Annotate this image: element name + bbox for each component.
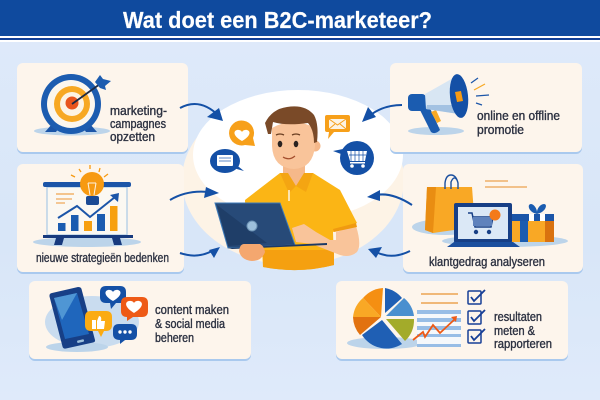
icon: target with arrow bbox=[34, 74, 111, 136]
icon: shopping bag, laptop and gift bbox=[412, 175, 568, 247]
icon: presentation board with bulb and chart bbox=[33, 165, 141, 247]
left hand bbox=[239, 244, 265, 261]
icon: heart bubble bbox=[229, 120, 255, 146]
laptop bbox=[215, 203, 295, 248]
arm and hand bbox=[292, 224, 359, 256]
text: content maken en social media beheren: & social media bbox=[155, 317, 225, 331]
icon: shopping cart bubble bbox=[333, 141, 374, 175]
arrow: promotion to marketer bbox=[362, 105, 402, 122]
icon: chat bubble bbox=[210, 149, 244, 173]
neck bbox=[283, 160, 305, 186]
hair bbox=[265, 106, 318, 143]
text: marketingcampagnes opzetten bbox=[110, 104, 167, 144]
text: resultaten meten en rapporteren: meten & bbox=[494, 324, 536, 338]
icon: mail bubble bbox=[325, 115, 350, 139]
panel: resultaten meten en rapporteren bbox=[336, 281, 568, 361]
text: online en offline promotie bbox=[477, 109, 560, 137]
arrow: campaigns to marketer bbox=[180, 104, 223, 121]
arrow: content to marketer bbox=[180, 247, 220, 258]
text: marketingcampagnes opzetten: opzetten bbox=[110, 130, 155, 144]
text: resultaten meten en rapporteren: rapporteren bbox=[494, 337, 552, 351]
central backdrop ellipse bbox=[182, 90, 404, 265]
text: marketingcampagnes opzetten: campagnes bbox=[110, 117, 166, 131]
head bbox=[310, 140, 320, 152]
text: content maken en social media beheren: beheren bbox=[155, 331, 194, 345]
icon: megaphone bbox=[408, 73, 489, 135]
panel: marketingcampagnes opzetten bbox=[17, 63, 188, 154]
text: marketingcampagnes opzetten: marketing- bbox=[110, 104, 167, 118]
text: online en offline promotie: promotie bbox=[477, 123, 524, 137]
arrow: behaviour to marketer bbox=[367, 190, 412, 205]
text: content maken en social media beheren bbox=[155, 303, 229, 345]
icon: pie chart bbox=[347, 288, 423, 349]
icon: report with trend line bbox=[413, 294, 461, 347]
text: resultaten meten en rapporteren bbox=[494, 310, 552, 351]
panel: nieuwe strategieën bedenken bbox=[17, 164, 184, 274]
arrow: results to marketer bbox=[368, 247, 410, 258]
text: resultaten meten en rapporteren: resultaten bbox=[494, 310, 542, 324]
text: content maken en social media beheren: content maken bbox=[155, 303, 229, 317]
shirt bbox=[245, 173, 357, 270]
text: online en offline promotie: online en offline bbox=[477, 109, 560, 123]
arrow: strategies to marketer bbox=[170, 187, 219, 200]
character: marketer with laptop bbox=[215, 106, 359, 270]
icon: checklist bbox=[468, 290, 485, 343]
icon: smartphone with social bubbles bbox=[45, 286, 148, 352]
panel: klantgedrag analyseren bbox=[403, 164, 583, 274]
text: klantgedrag analyseren: klantgedrag analyseren bbox=[429, 255, 545, 269]
panel: online en offline promotie bbox=[390, 63, 582, 154]
header banner bbox=[0, 0, 600, 42]
text: nieuwe strategieën bedenken: nieuwe strategieën bedenken bbox=[36, 251, 169, 265]
panel: content maken en social media beheren bbox=[29, 281, 251, 361]
title: Wat doet een B2C-marketeer? bbox=[123, 7, 432, 33]
